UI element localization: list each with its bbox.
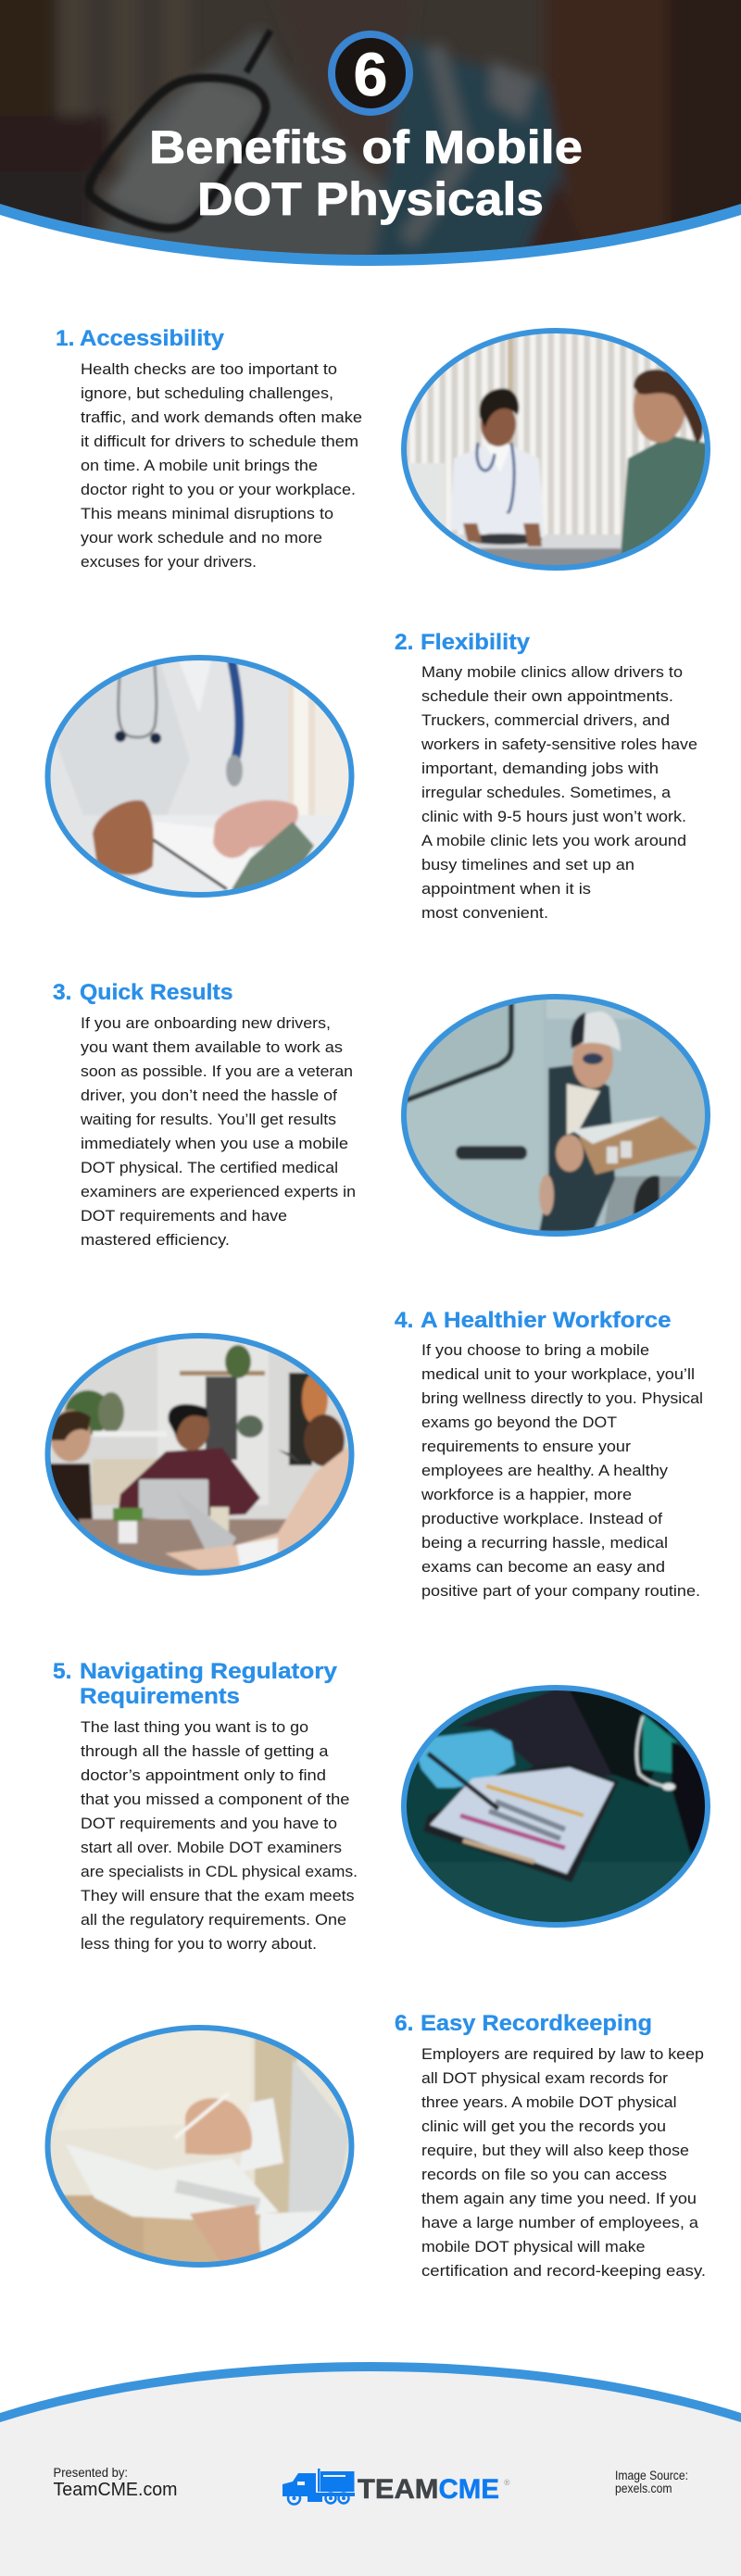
body text 4: employees are healthy. A healthy bbox=[421, 1462, 669, 1479]
number badge bbox=[332, 34, 409, 112]
wordmark: TEAM bbox=[358, 2474, 439, 2505]
heading 4: A Healthier Workforce bbox=[421, 1308, 671, 1333]
body text 2: irregular schedules. Sometimes, a bbox=[421, 784, 672, 801]
heading 5 bbox=[53, 1659, 337, 1709]
heading 3: Quick Results bbox=[80, 980, 233, 1005]
header panel bbox=[0, 0, 741, 266]
body text 3: If you are onboarding new drivers, bbox=[81, 1014, 331, 1032]
body text 1: This means minimal disruptions to bbox=[81, 505, 333, 522]
body text 1: it difficult for drivers to schedule them bbox=[81, 433, 358, 450]
body text 3 bbox=[80, 1014, 356, 1249]
footer panel bbox=[0, 2362, 741, 2576]
title: DOT Physicals bbox=[197, 173, 544, 225]
number badge: 6 bbox=[354, 40, 387, 108]
body text 6: have a large number of employees, a bbox=[421, 2214, 699, 2231]
body text 1: excuses for your drivers. bbox=[81, 553, 257, 571]
body text 4: being a recurring hassle, medical bbox=[421, 1534, 668, 1552]
image source: pexels.com bbox=[615, 2481, 672, 2495]
photo: doctor hands and clipboard bbox=[42, 653, 362, 903]
photo: hands holding paperwork bbox=[42, 2019, 361, 2269]
body text 2: A mobile clinic lets you work around bbox=[421, 832, 686, 849]
body text 6: mobile DOT physical will make bbox=[421, 2238, 645, 2256]
body text 2 bbox=[421, 663, 697, 922]
photo: gloved hand reviewing clipboard bbox=[398, 1681, 713, 1931]
body text 5: They will ensure that the exam meets bbox=[81, 1887, 354, 1904]
body text 3: you want them available to work as bbox=[81, 1038, 343, 1056]
wordmark: ® bbox=[504, 2478, 510, 2487]
heading 4: 4. bbox=[395, 1308, 413, 1333]
body text 4: requirements to ensure your bbox=[421, 1438, 631, 1455]
header background photo bbox=[0, 0, 741, 255]
wordmark: CME bbox=[439, 2474, 499, 2505]
body text 3: driver, you don’t need the hassle of bbox=[81, 1087, 337, 1104]
heading 2: 2. bbox=[395, 630, 413, 655]
body text 1: traffic, and work demands often make bbox=[81, 408, 362, 426]
body text 4: exams can become an easy and bbox=[421, 1558, 665, 1576]
body text 4: bring wellness directly to you. Physical bbox=[421, 1389, 703, 1407]
section 1: Accessibility bbox=[57, 328, 710, 571]
body text 5 bbox=[81, 1718, 358, 1953]
body text 2: Truckers, commercial drivers, and bbox=[421, 711, 670, 729]
body text 1: ignore, but scheduling challenges, bbox=[81, 384, 333, 402]
body text 2: busy timelines and set up an bbox=[421, 856, 634, 873]
photo: team meeting at a table bbox=[42, 1329, 361, 1579]
body text 5: through all the hassle of getting a bbox=[81, 1742, 329, 1760]
body text 4 bbox=[421, 1341, 703, 1600]
body text 6: clinic will get you the records you bbox=[421, 2117, 666, 2135]
presented by bbox=[54, 2465, 178, 2500]
section 4: A Healthier Workforce bbox=[42, 1308, 703, 1600]
body text 2: workers in safety-sensitive roles have bbox=[421, 735, 697, 753]
body text 2: schedule their own appointments. bbox=[421, 687, 673, 705]
heading 5: 5. bbox=[53, 1659, 71, 1684]
body text 2: important, demanding jobs with bbox=[421, 760, 659, 777]
body text 2: clinic with 9-5 hours just won’t work. bbox=[421, 808, 686, 825]
title: Benefits of Mobile bbox=[149, 121, 583, 173]
body text 4: exams go beyond the DOT bbox=[421, 1414, 617, 1431]
body text 5: The last thing you want is to go bbox=[81, 1718, 308, 1736]
body text 5: that you missed a component of the bbox=[81, 1791, 350, 1808]
heading 6: 6. bbox=[395, 2011, 413, 2036]
body text 5: less thing for you to worry about. bbox=[81, 1935, 317, 1953]
wordmark bbox=[358, 2474, 510, 2505]
body text 3: immediately when you use a mobile bbox=[81, 1135, 348, 1152]
body text 4: workforce is a happier, more bbox=[421, 1486, 632, 1503]
heading 3: 3. bbox=[53, 980, 71, 1005]
body text 5: start all over. Mobile DOT examiners bbox=[81, 1839, 342, 1856]
body text 4: productive workplace. Instead of bbox=[421, 1510, 662, 1527]
body text 6: records on file so you can access bbox=[421, 2166, 667, 2183]
body text 5: doctor’s appointment only to find bbox=[81, 1766, 326, 1784]
body text 3: DOT requirements and have bbox=[81, 1207, 287, 1225]
body text 1: your work schedule and no more bbox=[81, 529, 322, 547]
section 3: Quick Results bbox=[53, 980, 720, 1249]
body text 2: appointment when it is bbox=[421, 880, 591, 898]
body text 4: medical unit to your workplace, you’ll bbox=[421, 1365, 695, 1383]
body text 1: on time. A mobile unit brings the bbox=[81, 457, 318, 474]
body text 6 bbox=[421, 2045, 706, 2280]
body text 6: require, but they will also keep those bbox=[421, 2142, 689, 2159]
body text 3: mastered efficiency. bbox=[81, 1231, 230, 1249]
heading 1: 1. bbox=[56, 326, 74, 351]
photo: delivery driver with package bbox=[398, 991, 720, 1241]
body text 3: examiners are experienced experts in bbox=[81, 1183, 356, 1200]
body text 6: three years. A mobile DOT physical bbox=[421, 2093, 676, 2111]
body text 2: Many mobile clinics allow drivers to bbox=[421, 663, 683, 681]
heading 1: Accessibility bbox=[80, 326, 224, 351]
body text 3: DOT physical. The certified medical bbox=[81, 1159, 338, 1176]
image source bbox=[615, 2468, 688, 2495]
body text 4: positive part of your company routine. bbox=[421, 1582, 700, 1600]
presented by: TeamCME.com bbox=[54, 2480, 178, 2500]
heading 5: Navigating Regulatory bbox=[80, 1659, 337, 1684]
body text 5: are specialists in CDL physical exams. bbox=[81, 1863, 358, 1880]
body text 6: Employers are required by law to keep bbox=[421, 2045, 704, 2063]
body text 6: certification and record-keeping easy. bbox=[421, 2262, 706, 2280]
heading 6: Easy Recordkeeping bbox=[421, 2011, 652, 2036]
section 6: Easy Recordkeeping bbox=[42, 2011, 706, 2280]
icon: truck bbox=[283, 2469, 355, 2505]
body text 6: all DOT physical exam records for bbox=[421, 2069, 668, 2087]
image source: Image Source: bbox=[615, 2468, 688, 2482]
body text 1 bbox=[81, 360, 362, 571]
body text 5: all the regulatory requirements. One bbox=[81, 1911, 346, 1929]
heading 2: Flexibility bbox=[421, 630, 530, 655]
section 2: Flexibility bbox=[42, 630, 697, 922]
photo: doctor talking with patient bbox=[401, 328, 710, 571]
logo: TeamCME truck and wordmark bbox=[283, 2469, 510, 2505]
body text 3: waiting for results. You’ll get results bbox=[80, 1111, 336, 1128]
heading 5: Requirements bbox=[80, 1684, 240, 1709]
presented by: Presented by: bbox=[54, 2465, 128, 2480]
body text 5: DOT requirements and you have to bbox=[81, 1815, 337, 1832]
body text 1: doctor right to you or your workplace. bbox=[81, 481, 356, 498]
section 5: Navigating Regulatory Requirements bbox=[53, 1659, 713, 1953]
body text 4: If you choose to bring a mobile bbox=[421, 1341, 649, 1359]
body text 6: them again any time you need. If you bbox=[421, 2190, 697, 2207]
title bbox=[149, 121, 583, 225]
body text 1: Health checks are too important to bbox=[81, 360, 337, 378]
body text 2: most convenient. bbox=[421, 904, 548, 922]
body text 3: soon as possible. If you are a veteran bbox=[81, 1062, 353, 1080]
